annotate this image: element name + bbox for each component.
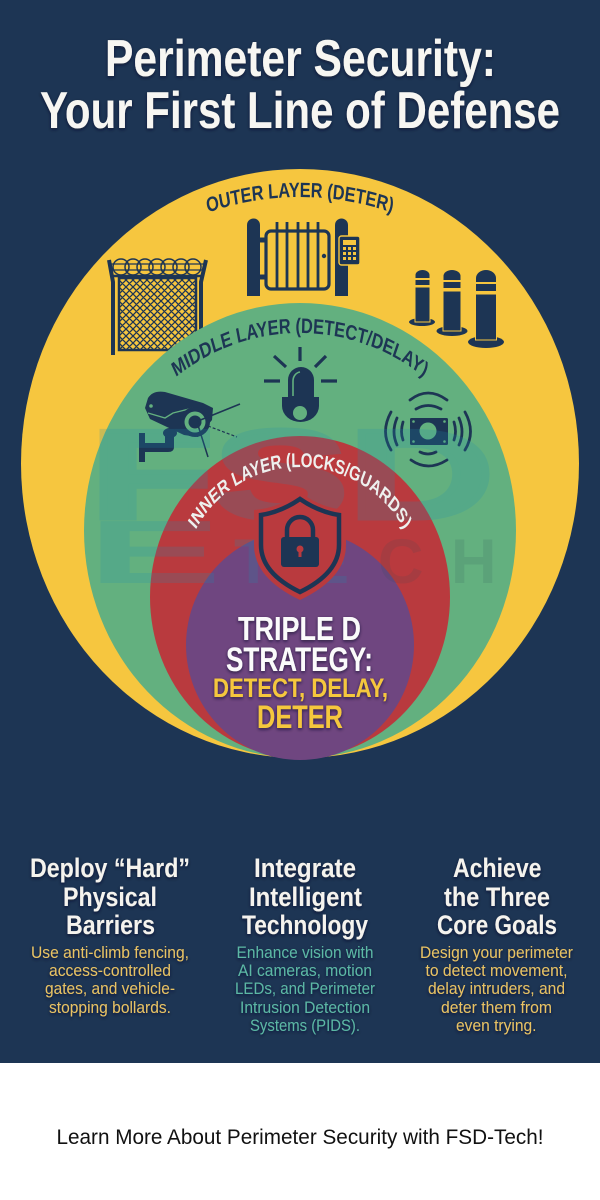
icon: anti-climb fence <box>109 259 206 355</box>
column heading: Intelligent <box>249 882 362 912</box>
icon: vibration sensor <box>386 393 470 466</box>
column description: Enhance vision with <box>236 943 374 962</box>
watermark: FSD Tech: TE <box>234 527 349 597</box>
column heading <box>30 853 190 940</box>
column heading: the Three <box>444 882 550 912</box>
middle layer label: MIDDLE LAYER (DETECT/DELAY) <box>171 318 428 379</box>
watermark: FSD Tech: FSD <box>90 404 494 545</box>
center text: triple D strategy: DETECT, DELAY, <box>213 673 388 703</box>
outer layer circle <box>21 169 579 758</box>
footer call to action: Learn More About Perimeter Security with FSD-Tech! <box>56 1126 544 1149</box>
column description: to detect movement, <box>426 961 568 980</box>
icon: access gate with keypad <box>247 219 360 296</box>
icon: bollards <box>409 270 504 348</box>
title <box>40 30 560 140</box>
column: three core goals <box>420 853 573 1035</box>
column description: Design your perimeter <box>420 943 573 962</box>
center text: triple D strategy: STRATEGY: <box>226 641 373 679</box>
column heading <box>242 853 368 940</box>
icon: security camera <box>139 392 240 462</box>
column description: LEDs, and Perimeter <box>235 979 375 998</box>
column heading: Core Goals <box>437 910 557 940</box>
column description: delay intruders, and <box>428 979 565 998</box>
column description: Systems (PIDS). <box>250 1016 360 1035</box>
column heading <box>437 853 557 940</box>
middle layer circle <box>84 303 516 758</box>
center text: triple D strategy: TRIPLE D <box>238 610 361 647</box>
icon: alarm beacon <box>264 347 337 422</box>
watermark: FSD Tech <box>87 404 496 603</box>
icon: shield with padlock <box>254 492 346 600</box>
column heading: Technology <box>242 910 368 940</box>
column heading: Deploy “Hard” <box>30 853 190 883</box>
column description: gates, and vehicle- <box>45 979 175 998</box>
column description <box>420 943 573 1035</box>
column description: access-controlled <box>49 961 171 980</box>
column description <box>235 943 375 1035</box>
column description <box>31 943 189 1017</box>
column heading: Integrate <box>254 853 356 883</box>
inner layer circle <box>150 436 450 758</box>
column description: AI cameras, motion <box>238 961 372 980</box>
column description: Use anti-climb fencing, <box>31 943 189 962</box>
column description: Intrusion Detection <box>240 998 370 1017</box>
column: intelligent technology <box>235 853 375 1035</box>
watermark: FSD Tech: E <box>87 503 222 603</box>
outer layer label: OUTER LAYER (DETER) <box>206 182 393 216</box>
watermark: FSD Tech: CH <box>378 527 496 597</box>
column heading: Barriers <box>66 910 155 940</box>
inner layer label: INNER LAYER (LOCKS/GUARDS) <box>188 452 412 530</box>
column description: stopping bollards. <box>49 998 171 1017</box>
column heading: Physical <box>63 882 157 912</box>
core circle <box>186 530 414 760</box>
column heading: Achieve <box>453 853 542 883</box>
column description: even trying. <box>456 1016 536 1035</box>
center text: triple D strategy: DETER <box>257 699 343 735</box>
title: Perimeter Security: <box>105 30 496 88</box>
column: physical barriers <box>30 853 190 1017</box>
center text: triple D strategy <box>213 610 388 735</box>
column description: deter them from <box>441 998 552 1017</box>
